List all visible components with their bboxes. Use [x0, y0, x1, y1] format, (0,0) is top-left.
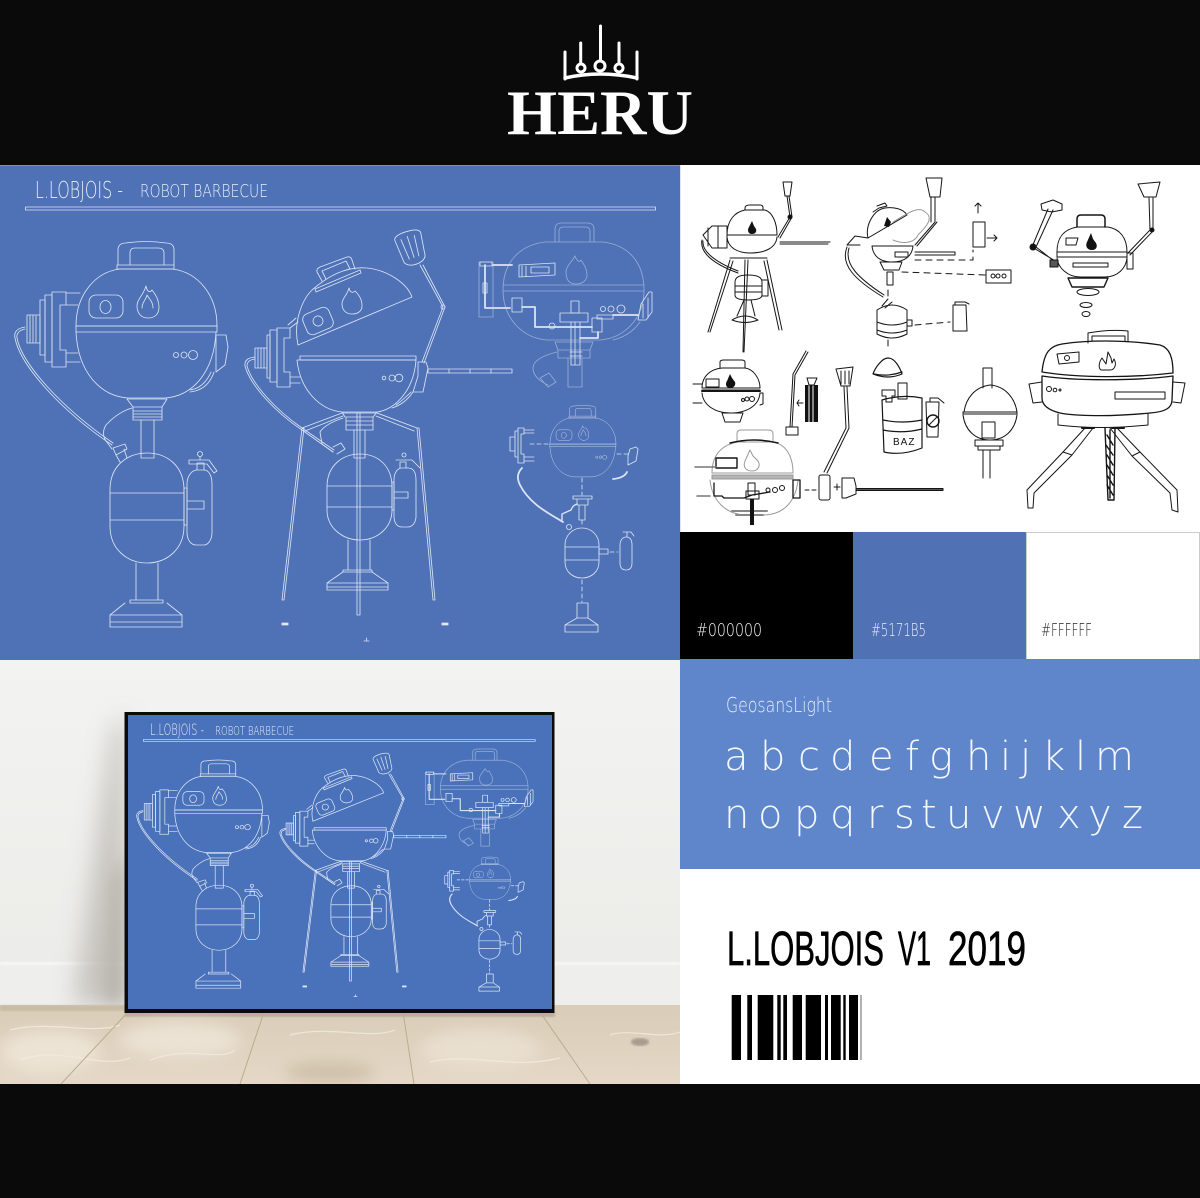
panel: typeface specimen — [680, 659, 1200, 869]
mockup poster drawings — [137, 740, 535, 996]
sketch: large grill on tripod — [1027, 330, 1185, 512]
sketch: rod and black cylinder — [786, 351, 818, 435]
swatch: blue: #5171B5 — [871, 620, 926, 641]
swatch: blue — [853, 532, 1026, 659]
sketch: rear view sphere — [963, 368, 1017, 478]
version title: L.LOBJOIS — [727, 923, 884, 976]
swatch: black: #000000 — [696, 620, 762, 641]
sketch: cutaway grill — [695, 430, 800, 525]
sketch: gas tank with extinguisher: BAZ — [893, 437, 915, 448]
sketch: closed grill side — [693, 360, 763, 422]
swatch: white — [1026, 532, 1200, 660]
wordmark: HERU — [507, 77, 693, 148]
logo: HERU crown and wordmark — [507, 26, 693, 148]
typeface name: GeosansLight — [726, 693, 832, 717]
version title: V1 — [898, 923, 931, 976]
panel: colour palette — [680, 532, 1200, 660]
swatch: white: #FFFFFF — [1041, 620, 1092, 641]
sketch: spatula arm and skewer — [805, 367, 943, 500]
panel: hand sketches — [680, 165, 1200, 532]
alphabet first row: abcdefghijklm — [724, 734, 1134, 780]
panel: poster mockup photo — [0, 660, 680, 1084]
blueprint title: ROBOT BARBECUE — [140, 181, 268, 202]
sketch: gas tank with extinguisher — [873, 358, 944, 453]
icon: crown — [565, 26, 637, 79]
version title: 2019 — [948, 923, 1026, 976]
alphabet second row: nopqrstuvwxyz — [724, 792, 1143, 838]
blueprint title — [35, 178, 268, 204]
panel: blueprint poster — [0, 165, 680, 660]
footer band — [0, 1084, 1200, 1198]
header band — [0, 0, 1200, 165]
swatch: black — [680, 532, 853, 659]
wall — [0, 660, 680, 1005]
skirting board — [0, 962, 680, 1005]
blueprint title: L.LOBJOIS - — [35, 178, 123, 204]
panel: version and barcode — [680, 869, 1200, 1084]
wooden floor — [0, 1005, 680, 1084]
sketch: flying robot with arms — [1030, 182, 1160, 316]
blueprint line drawings of robot barbecue — [15, 207, 655, 641]
mockup poster title — [150, 720, 294, 739]
framed poster — [124, 712, 554, 1013]
sketch: exploded robot views — [845, 178, 1011, 350]
barcode — [732, 995, 861, 1060]
frame shadow — [74, 714, 126, 1005]
mockup poster title: L.LOBJOIS - — [150, 720, 204, 739]
mockup poster title: ROBOT BARBECUE — [215, 724, 294, 738]
sketch: robot on tripod — [702, 182, 830, 352]
